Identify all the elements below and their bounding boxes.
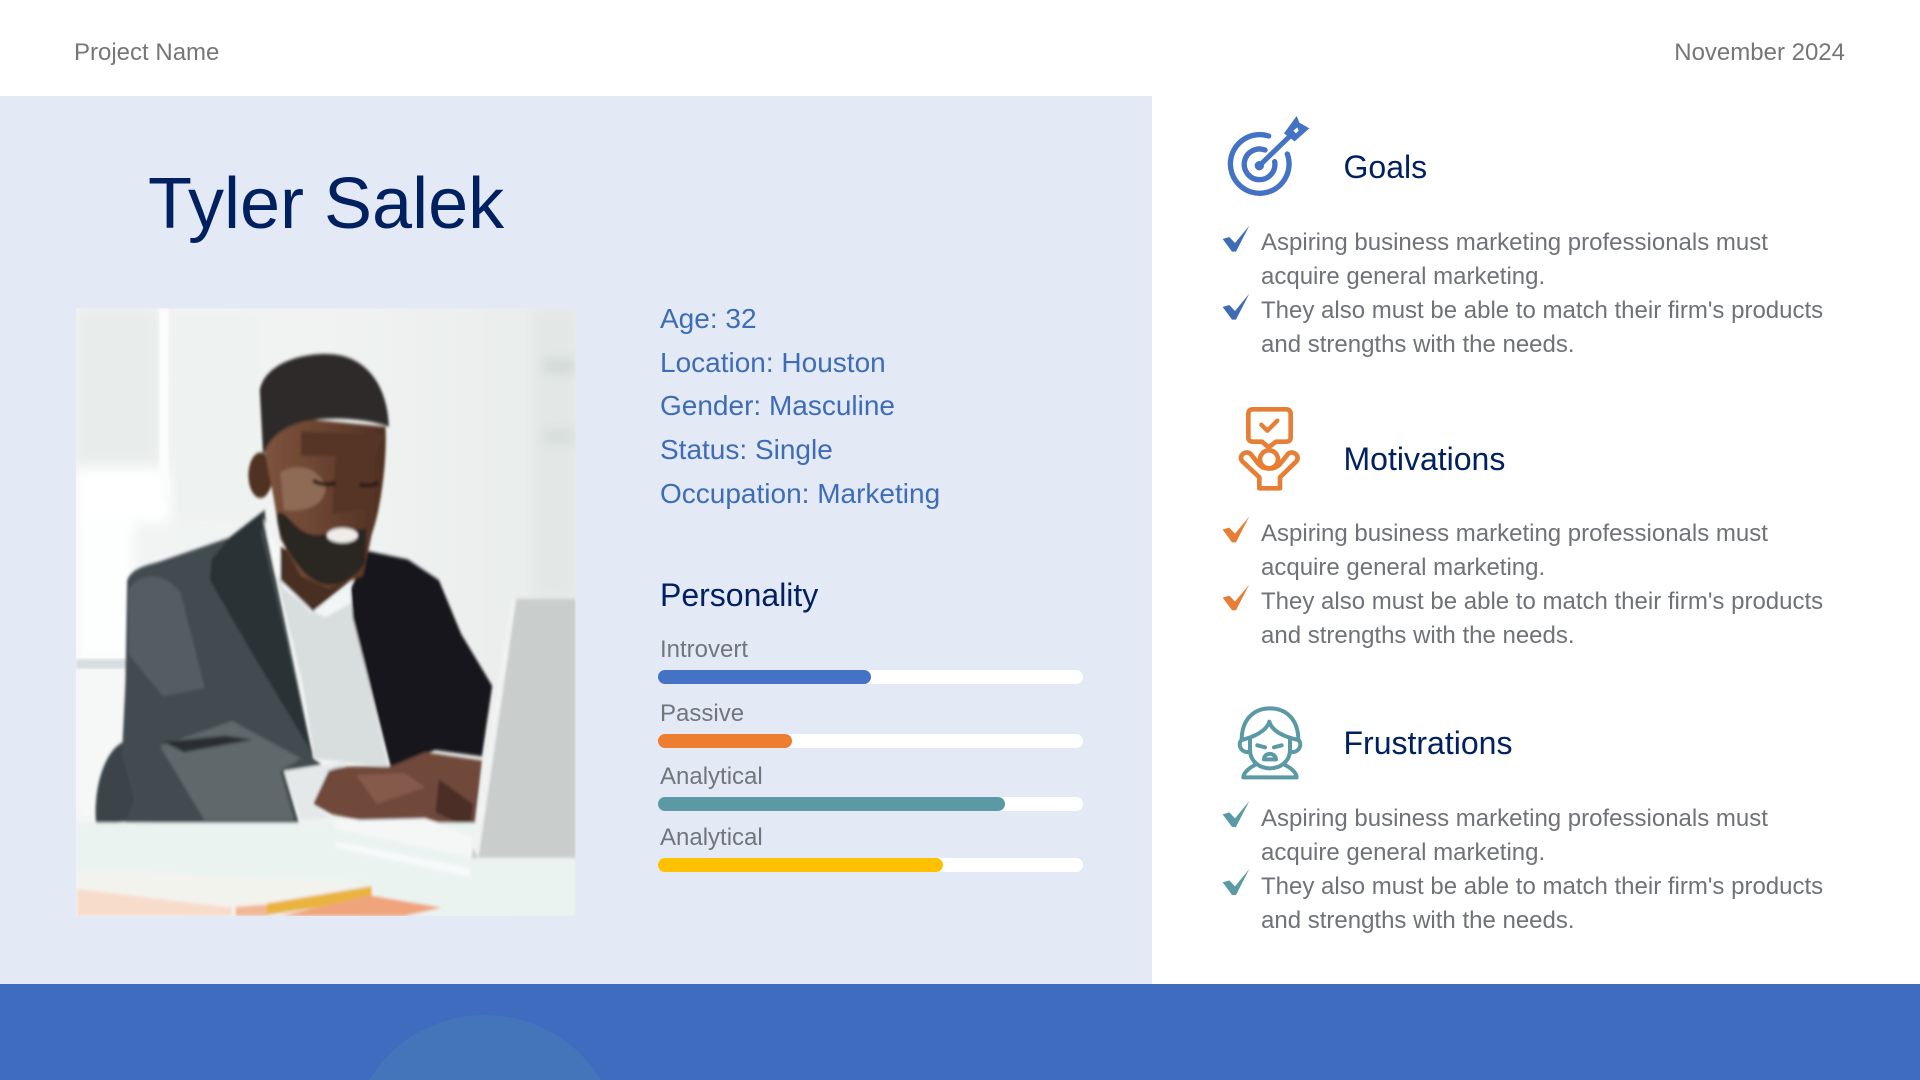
text block: frustrations list bbox=[1261, 805, 1823, 934]
icon: person with speech check bbox=[1238, 407, 1300, 491]
chart: personality bars bbox=[658, 636, 1083, 872]
text block: goals list: They also must be able to match their firm's products bbox=[1261, 297, 1823, 324]
checks: motivations bbox=[1223, 516, 1249, 610]
bar: analytical yellow: Analytical bbox=[660, 824, 763, 851]
bar: introvert bbox=[658, 636, 1083, 684]
text block: motivations list: Aspiring business marketing professionals must bbox=[1261, 520, 1768, 547]
bar: introvert: Introvert bbox=[660, 636, 748, 663]
panel: profile background bbox=[0, 96, 1152, 984]
text block: goals list bbox=[1261, 229, 1823, 358]
photo: man working on a laptop bbox=[76, 308, 576, 916]
text block: frustrations list: acquire general marketing. bbox=[1261, 839, 1545, 866]
bar: analytical teal bbox=[658, 763, 1083, 811]
text block: motivations list: and strengths with the needs. bbox=[1261, 622, 1575, 649]
icon: target with arrow bbox=[1228, 116, 1310, 196]
decorative circle bbox=[369, 1015, 601, 1080]
text block: goals list: Aspiring business marketing professionals must bbox=[1261, 229, 1768, 256]
title: persona name: Tyler Salek bbox=[148, 164, 505, 244]
heading: personality: Personality bbox=[660, 577, 818, 613]
text block: frustrations list: They also must be able to match their firm's products bbox=[1261, 873, 1823, 900]
panel: goals bbox=[1223, 116, 1823, 358]
header: date: November 2024 bbox=[1674, 39, 1845, 66]
text block: demographic details: Occupation: Marketing bbox=[660, 478, 940, 509]
footer band bbox=[0, 984, 1920, 1080]
checks: frustrations bbox=[1223, 801, 1249, 895]
bar: analytical yellow bbox=[658, 824, 1083, 872]
text block: frustrations list: and strengths with the needs. bbox=[1261, 907, 1575, 934]
panel: motivations bbox=[1223, 409, 1823, 649]
text block: goals list: acquire general marketing. bbox=[1261, 263, 1545, 290]
heading: motivations: Motivations bbox=[1344, 441, 1505, 477]
bar: passive: Passive bbox=[660, 700, 744, 727]
text block: frustrations list: Aspiring business marketing professionals must bbox=[1261, 805, 1768, 832]
heading: frustrations: Frustrations bbox=[1344, 725, 1512, 761]
checks: goals bbox=[1223, 226, 1249, 320]
text block: demographic details: Status: Single bbox=[660, 434, 833, 465]
text block: demographic details: Age: 32 bbox=[660, 303, 757, 334]
bar: analytical teal: Analytical bbox=[660, 763, 763, 790]
icon: crying face bbox=[1238, 706, 1302, 780]
bar: passive bbox=[658, 700, 1083, 748]
text block: demographic details: Gender: Masculine bbox=[660, 390, 895, 421]
text block: goals list: and strengths with the needs. bbox=[1261, 331, 1575, 358]
text block: demographic details bbox=[660, 303, 940, 509]
text block: demographic details: Location: Houston bbox=[660, 347, 886, 378]
text block: motivations list bbox=[1261, 520, 1823, 649]
text block: motivations list: They also must be able to match their firm's products bbox=[1261, 588, 1823, 615]
heading: goals: Goals bbox=[1344, 149, 1427, 185]
header: project name: Project Name bbox=[74, 39, 219, 66]
text block: motivations list: acquire general marketing. bbox=[1261, 554, 1545, 581]
panel: frustrations bbox=[1223, 708, 1823, 934]
